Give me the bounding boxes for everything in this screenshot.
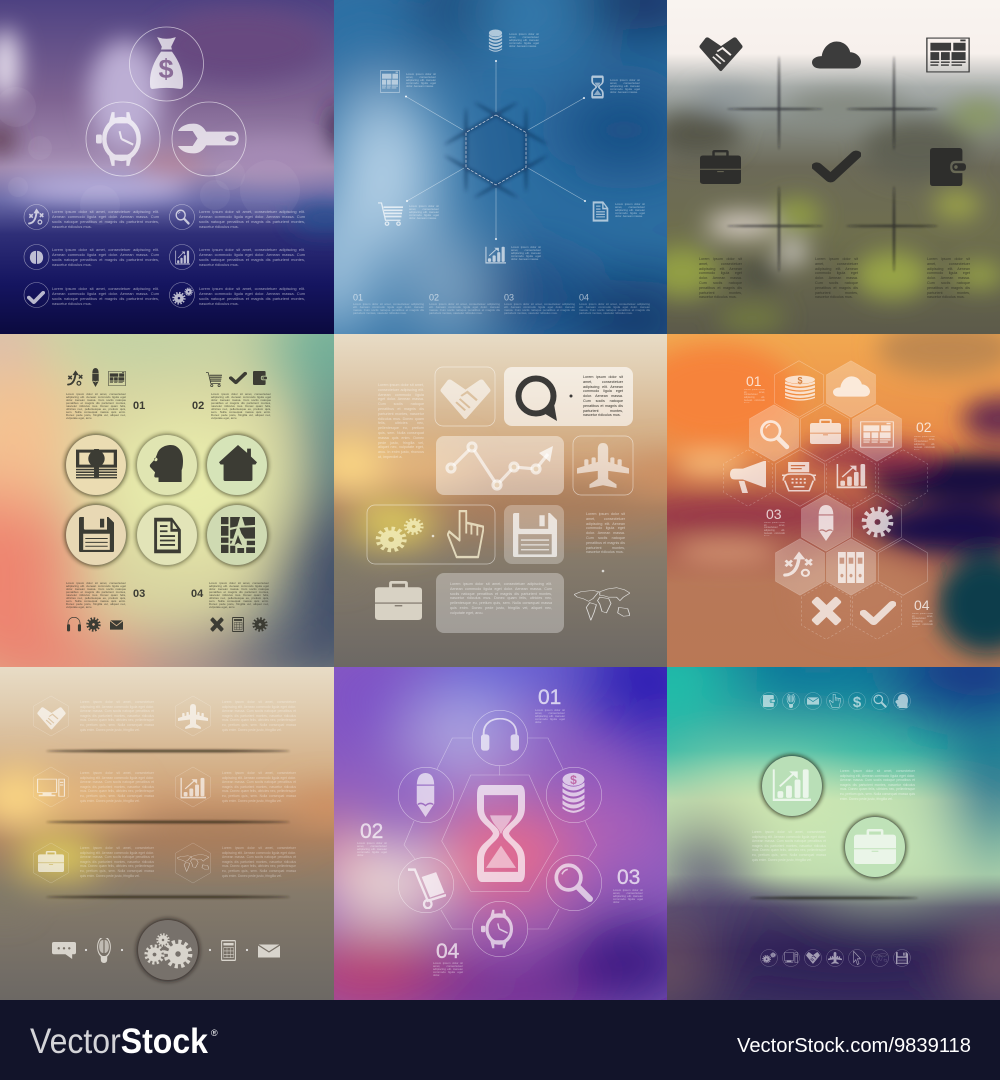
icon: growth chart [837,464,867,488]
number 03 [613,866,643,906]
icon: magnifier [761,421,787,447]
text and number block 01 with icons: 01 [133,400,145,412]
item: document [593,201,645,222]
row item: computer [34,767,154,807]
icon: briefcase [810,419,841,444]
number 02 [357,820,387,859]
column 02: 02 [429,292,439,302]
connector dots [85,949,248,951]
icon: world map [574,570,630,620]
row item: handshake: Lorem ipsum dolor sit amet, consectetuer adipiscing elit. Aenean commodo ligula eget dolor. Aenean massa. Cum sociis natoque penatibus et magnis dis parturient montes, nascetur ridiculus mus. Donec quam felis, ultricies nec, pellentesque eu, pretium quis, sem. Nulla consequat massa quis enim. Donec pede justo, fringilla vel. [80,700,154,732]
icon: briefcase [375,581,422,620]
number 01: 01 [538,686,561,709]
number 02: 02 [916,419,932,435]
item: hourglass [591,75,640,99]
text column 2: Lorem ipsum dolor sit amet, consectetuer adipiscing elit. Aenean commodo ligula eget dolor. Aenean massa. Cum sociis natoque penatibus et magnis dis parturient montes, nascetur ridiculus mus. [815,257,858,299]
panel: dark icons on blurred landscape [646,0,1000,334]
item: bar chart [485,246,541,264]
row item: world map [176,843,296,883]
crossing shadow lines [727,56,938,272]
circle: head [136,434,198,496]
text and number block 04 with icons: 04 [191,588,204,600]
text and number block 01 with icons [66,368,145,421]
icon: wrench [172,102,246,176]
panel 8 background [284,617,719,1020]
icon: light bulb [98,937,110,963]
feature: chart: Lorem ipsum dolor sit amet, consectetuer adipiscing elit. Aenean commodo ligula eget dolor. Aenean massa. Cum sociis natoque penatibus et magnis dis parturient montes, nascetur ridiculus mus. [199,246,305,266]
column 04 [579,294,650,314]
row item: computer: Lorem ipsum dolor sit amet, consectetuer adipiscing elit. Aenean commodo ligula eget dolor. Aenean massa. Cum sociis natoque penatibus et magnis dis parturient montes, nascetur ridiculus mus. Donec quam felis, ultricies nec, pellentesque eu, pretium quis, sem. Nulla consequat massa quis enim. Donec pede justo, fringilla vel. [80,771,154,803]
icon: web layout [861,422,893,447]
circled icons [398,710,602,957]
column 01 [353,294,424,314]
text beside briefcase circle: Lorem ipsum dolor sit amet, consectetuer adipiscing elit. Aenean commodo ligula eget dolor. Aenean massa. Cum sociis natoque penatibus et magnis dis parturient montes, nascetur ridiculus mus. Donec quam felis, ultricies nec, pellentesque eu, pretium quis, sem. Nulla consequat massa quis enim. Donec pede justo, fringilla vel. [752,830,826,862]
tile: text box [436,573,564,633]
icon: web layout [927,38,969,72]
feature: gears: Lorem ipsum dolor sit amet, consectetuer adipiscing elit. Aenean commodo ligula eget dolor. Aenean massa. Cum sociis natoque penatibus et magnis dis parturient montes, nascetur ridiculus mus. [199,286,305,306]
icon: coins [785,376,815,401]
row item: handshake [34,696,154,736]
icon: binders [838,552,864,583]
row item: airplane [176,696,296,736]
feature: strategy [24,204,159,230]
feature: gears [170,282,305,308]
panel 7 background [0,667,370,1001]
column 04: 04 [579,292,589,302]
item: shopping cart [378,203,439,225]
shadow dividers [46,750,290,898]
briefcase circle [844,816,906,878]
number 04 [912,597,933,627]
top icon row: $ [853,694,862,711]
bottom icon row with gears circle [52,919,280,981]
tile: text box: Lorem ipsum dolor sit amet, consectetuer adipiscing elit. Aenean commodo ligula eget dolor. Aenean massa. Cum sociis natoque penatibus et magnis dis parturient montes, nascetur ridiculus mus. Donec quam felis, ultricies nec, pellentesque eu, pretium quis, sem. Nulla consequat massa quis enim. Donec pede justo, fringilla vel, aliquet nec, vulputate eget, arcu. [450,582,552,615]
feature: check [24,282,159,308]
hexagon tiles [724,361,928,639]
text column 3: Lorem ipsum dolor sit amet, consectetuer adipiscing elit. Aenean commodo ligula eget dolor. Aenean massa. Cum sociis natoque penatibus et magnis dis parturient montes, nascetur ridiculus mus. [927,257,970,299]
connector lines [405,60,586,240]
row item: airplane: Lorem ipsum dolor sit amet, consectetuer adipiscing elit. Aenean commodo ligula eget dolor. Aenean massa. Cum sociis natoque penatibus et magnis dis parturient montes, nascetur ridiculus mus. Donec quam felis, ultricies nec, pellentesque eu, pretium quis, sem. Nulla consequat massa quis enim. Donec pede justo, fringilla vel. [222,700,296,732]
number 03 [764,506,785,536]
hexagon framework lines [404,738,597,929]
panel: hexagon rows with shadow dividers [0,667,370,1001]
number 03: 03 [617,866,640,889]
panel 1 background [0,0,359,334]
icon: cross [812,597,841,625]
icon: briefcase [700,150,741,184]
icon: calculator [222,941,235,960]
panel: purple hourglass hexagon [284,617,719,1020]
number 01: 01 [746,373,762,389]
number 02 [914,419,935,450]
text and number block 02 with icons [192,371,271,421]
icon: megaphone [730,461,766,493]
icon: cloud [833,376,870,397]
icon grid [699,37,969,186]
number 01 [744,373,765,403]
icon: hand truck [398,857,454,913]
circle: house [206,434,268,496]
column 03: 03 [504,292,514,302]
number 04: 04 [914,597,930,613]
footer bar [0,1000,1000,1080]
top icon row [760,692,910,711]
text and number block 04 with icons [191,582,269,632]
hexagon shadow creases [444,101,548,199]
chart circle [761,755,823,817]
panel 3 background [646,0,1000,334]
panel: teal gradient with two circles [622,627,1000,1004]
item: web layout [380,71,436,92]
panel: blue hexagon diagram [334,0,667,334]
icon: coins [546,767,602,823]
tile: gears and pointer [367,505,495,564]
row item: briefcase: Lorem ipsum dolor sit amet, consectetuer adipiscing elit. Aenean commodo ligula eget dolor. Aenean massa. Cum sociis natoque penatibus et magnis dis parturient montes, nascetur ridiculus mus. Donec quam felis, ultricies nec, pellentesque eu, pretium quis, sem. Nulla consequat massa quis enim. Donec pede justo, fringilla vel. [80,846,154,878]
column 03 [504,294,575,314]
row item: chart [176,767,296,807]
panel: six circles on pastel gradient [0,289,404,704]
feature: strategy: Lorem ipsum dolor sit amet, consectetuer adipiscing elit. Aenean commodo ligula eget dolor. Aenean massa. Cum sociis natoque penatibus et magnis dis parturient montes, nascetur ridiculus mus. [52,208,159,228]
feature: search: Lorem ipsum dolor sit amet, consectetuer adipiscing elit. Aenean commodo ligula eget dolor. Aenean massa. Cum sociis natoque penatibus et magnis dis parturient montes, nascetur ridiculus mus. [199,208,305,228]
registered mark: ® [211,1028,218,1038]
icon: watch [472,901,528,957]
icon: pencil [398,767,454,823]
icon: cloud [812,42,861,68]
left text column: Lorem ipsum dolor sit amet, consectetuer adipiscing elit. Aenean commodo ligula eget dolor. Aenean massa. Cum sociis natoque penatibus et magnis dis parturient montes, nascetur ridiculus mus. Donec quam felis, ultricies nec, pellentesque eu, pretium quis, sem. Nulla consequat massa quis enim. Donec pede justo, fringilla vel, aliquet nec, vulputate eget, arcu. In enim justo, rhoncus ut, imperdiet a. [378,383,424,459]
three text columns [699,257,970,306]
icon: strategy [785,552,812,576]
hexagon icons [730,376,893,625]
text and number block 03 with icons [66,582,145,631]
column 02 [429,294,500,314]
text column 1: Lorem ipsum dolor sit amet, consectetuer adipiscing elit. Aenean commodo ligula eget dolor. Aenean massa. Cum sociis natoque penatibus et magnis dis parturient montes, nascetur ridiculus mus. [699,257,742,299]
feature: check: Lorem ipsum dolor sit amet, consectetuer adipiscing elit. Aenean commodo ligula eget dolor. Aenean massa. Cum sociis natoque penatibus et magnis dis parturient montes, nascetur ridiculus mus. [52,286,159,306]
panel: money bag, watch and wrench with six features [0,0,359,334]
icon: envelope [258,945,280,957]
feature: brain [24,244,159,270]
text and number block 03 with icons: 03 [133,588,145,600]
icon: wallet [930,148,966,186]
numbered columns 01 to 04 [353,294,650,314]
feature list with six icons and descriptions [24,204,305,308]
icon: check mark [817,155,856,178]
tile: floppy disk [504,505,564,564]
icon: money bag [130,27,204,101]
number 03: 03 [766,506,782,522]
feature: brain: Lorem ipsum dolor sit amet, consectetuer adipiscing elit. Aenean commodo ligula eget dolor. Aenean massa. Cum sociis natoque penatibus et magnis dis parturient montes, nascetur ridiculus mus. [52,246,159,266]
tile: speech bubble and text [504,367,633,426]
hexagon rows [34,696,296,883]
panel: honeycomb icons [627,321,1000,668]
icon: gear [864,509,891,535]
central dashed hexagon [466,115,526,185]
panel 9 background [622,627,1000,1004]
text beside chart circle: Lorem ipsum dolor sit amet, consectetuer adipiscing elit. Aenean commodo ligula eget dolor. Aenean massa. Cum sociis natoque penatibus et magnis dis parturient montes, nascetur ridiculus mus. Donec quam felis, ultricies nec, pellentesque eu, pretium quis, sem. Nulla consequat massa quis enim. Donec pede justo, fringilla vel. [840,769,915,801]
icon: wristwatch [86,102,160,176]
six large circle buttons [65,434,268,566]
icon: coins: $ [570,773,577,787]
icon: hourglass [477,785,525,882]
text and number block 02 with icons: 02 [192,400,204,412]
number 01 [535,686,565,726]
bottom icon row [760,950,910,966]
item: coins [489,29,539,52]
row item: world map: Lorem ipsum dolor sit amet, consectetuer adipiscing elit. Aenean commodo ligula eget dolor. Aenean massa. Cum sociis natoque penatibus et magnis dis parturient montes, nascetur ridiculus mus. Donec quam felis, ultricies nec, pellentesque eu, pretium quis, sem. Nulla consequat massa quis enim. Donec pede justo, fringilla vel. [222,846,296,878]
circle: floppy disk [65,504,127,566]
circle: map [206,504,268,566]
icon: pencil [819,505,833,541]
panel 6 background [627,321,1000,668]
icons and captions around the hexagon [378,29,645,264]
panel 4 background [0,289,404,704]
row item: briefcase [34,843,154,883]
panel 5 background [310,334,704,668]
tile: line chart [436,436,564,495]
column 01: 01 [353,292,363,302]
icon: money bag: $ [158,54,174,84]
icon: gears in circle [137,919,199,981]
feature: chart [170,244,305,270]
row item: chart: Lorem ipsum dolor sit amet, consectetuer adipiscing elit. Aenean commodo ligula eget dolor. Aenean massa. Cum sociis natoque penatibus et magnis dis parturient montes, nascetur ridiculus mus. Donec quam felis, ultricies nec, pellentesque eu, pretium quis, sem. Nulla consequat massa quis enim. Donec pede justo, fringilla vel. [222,771,296,803]
icon: magnifier [546,855,602,911]
circle: document [136,504,198,566]
right text column: Lorem ipsum dolor sit amet, consectetuer adipiscing elit. Aenean commodo ligula eget dolor. Aenean massa. Cum sociis natoque penatibus et magnis dis parturient montes, nascetur ridiculus mus. [586,512,625,554]
icon: handshake [699,37,743,71]
number 04 [433,940,463,979]
circle: money [65,434,127,496]
icon: typewriter [782,462,816,491]
number 04: 04 [436,940,460,963]
three large circled icons [86,27,246,176]
tile: speech bubble and text: Lorem ipsum dolor sit amet, consectetuer adipiscing elit. Aenean commodo ligula eget dolor. Aenean massa. Cum sociis natoque penatibus et magnis dis parturient montes, nascetur ridiculus mus. [583,375,623,417]
tile: handshake [435,367,495,426]
shadow divider [750,897,918,899]
feature: search [170,204,305,230]
icon: check [864,604,892,622]
icon: coins: $ [797,376,803,386]
logo wordmark: VectorStock [30,1022,208,1061]
number 02: 02 [360,820,383,843]
panel: rounded tile grid [310,334,704,668]
icon: headphones [472,710,528,766]
tile: airplane [573,436,633,495]
image id: VectorStock.com/9839118 [737,1035,971,1057]
icon: chat bubble [52,942,76,959]
panel 2 background [334,0,667,334]
